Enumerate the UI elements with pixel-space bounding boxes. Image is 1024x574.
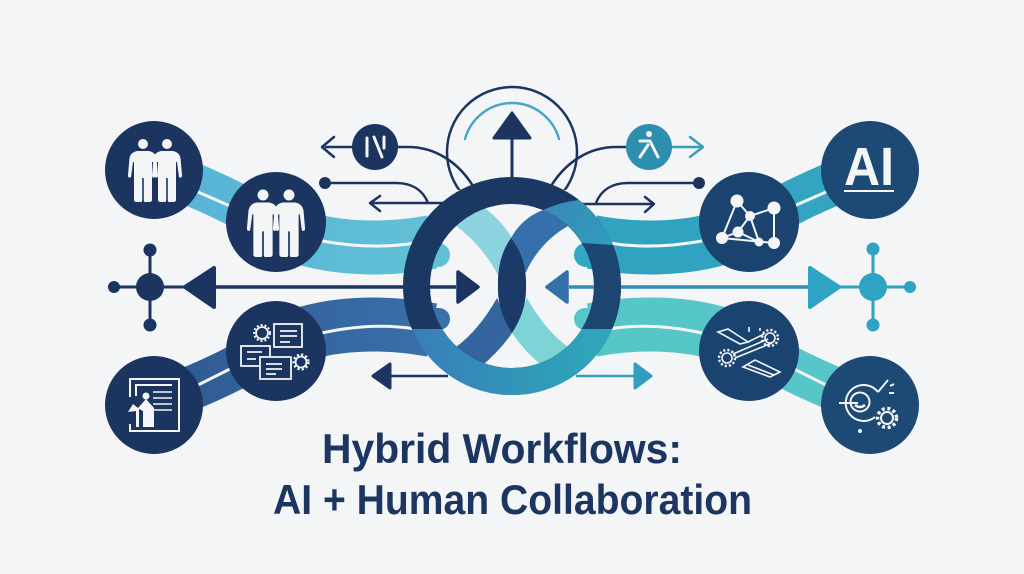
top circle with up arrow bbox=[446, 86, 578, 190]
icon: network graph bbox=[699, 172, 799, 272]
stream: human upper left bbox=[170, 176, 438, 255]
stream: AI lower right bbox=[585, 319, 854, 396]
inner arrowhead left bbox=[458, 272, 478, 302]
left connector and arrow bbox=[319, 177, 446, 211]
bottom left arrow bbox=[373, 364, 448, 388]
icon: vision target and gear bbox=[821, 356, 919, 454]
title line 1: Hybrid Workflows: bbox=[322, 425, 682, 472]
icon: presenter at screen bbox=[105, 356, 203, 454]
icon: AI label: AI bbox=[844, 137, 894, 197]
stream: workflow lower left bbox=[170, 319, 439, 396]
inner arrowhead right bbox=[547, 272, 567, 302]
bottom right arrow bbox=[576, 364, 651, 388]
stream: AI upper right bbox=[586, 176, 854, 255]
icon: AI label bbox=[821, 121, 919, 219]
icon: two people, far left bbox=[105, 121, 203, 219]
left axis with node bbox=[108, 244, 456, 332]
icon: two people, inner left bbox=[226, 172, 326, 272]
icon: documents and gears bbox=[226, 301, 326, 401]
right connector and arrow bbox=[578, 177, 705, 212]
N badge with left arrow bbox=[322, 124, 473, 186]
central interlocking rings bbox=[416, 190, 613, 382]
runner badge with right arrow bbox=[551, 124, 703, 186]
right axis with node bbox=[569, 242, 916, 332]
title line 2: AI + Human Collaboration bbox=[273, 476, 752, 523]
icon: robotic arm and gears bbox=[699, 301, 799, 401]
title bbox=[273, 425, 752, 523]
